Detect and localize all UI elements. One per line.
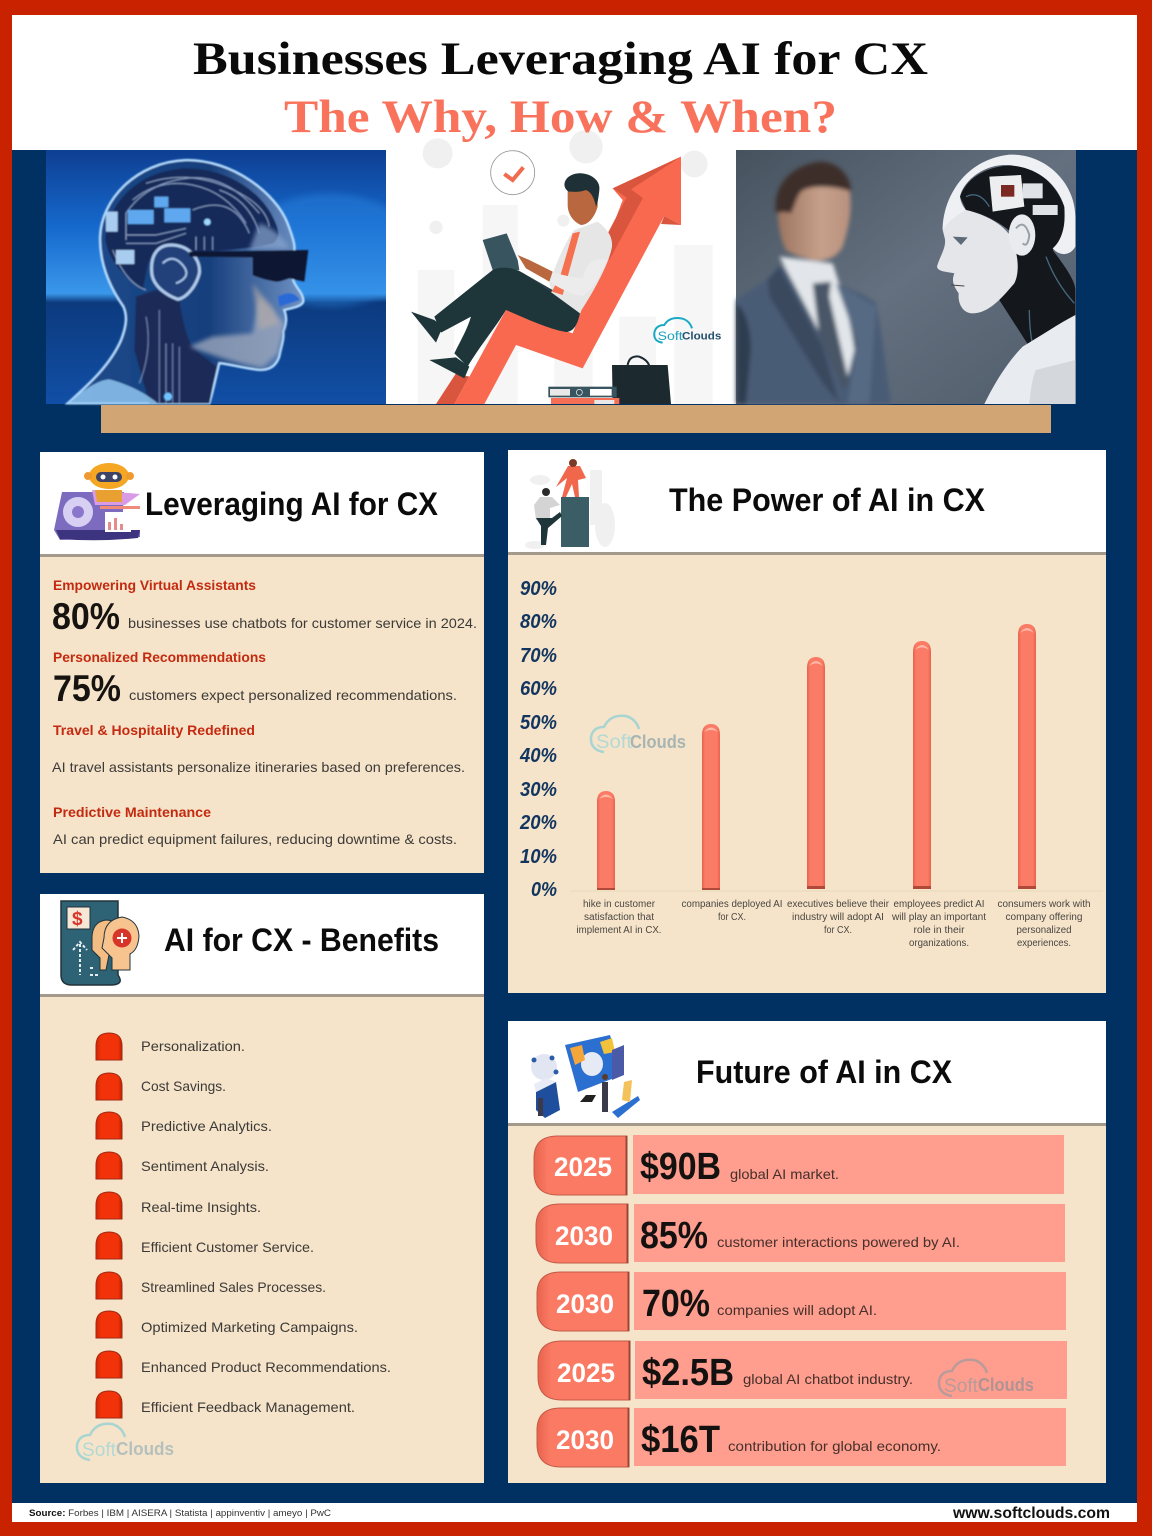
row: 2030 $16T — [537, 1408, 1066, 1467]
row: 2025 $90B: global AI market. — [730, 1166, 839, 1182]
logo: SoftClouds watermark — [939, 1360, 1034, 1397]
row: 2025 $90B: 2025 — [554, 1152, 612, 1182]
text block: personalized recommendations: Personalized Recommendations — [53, 649, 266, 665]
x axis labels: experiences. — [1017, 938, 1071, 949]
x axis labels: hike in customer — [583, 899, 656, 910]
benefit 7 — [96, 1272, 326, 1299]
benefit 1 — [96, 1033, 245, 1060]
benefits list — [96, 1033, 391, 1418]
benefit 6: Efficient Customer Service. — [141, 1239, 314, 1255]
y axis labels — [519, 578, 557, 901]
benefit 10: Efficient Feedback Management. — [141, 1399, 355, 1415]
row: 2025 $2.5B: $2.5B — [642, 1352, 734, 1394]
text block: personalized recommendations — [53, 649, 457, 709]
row: 2030 70%: 2030 — [556, 1289, 614, 1319]
bar: 80% — [1018, 624, 1036, 889]
benefit 2: Cost Savings. — [141, 1078, 226, 1094]
benefit 4 — [96, 1152, 269, 1179]
text block: virtual assistants: businesses use chatbots for customer service in 2024. — [128, 615, 477, 631]
benefit 4: Sentiment Analysis. — [141, 1158, 269, 1174]
text block: travel — [52, 722, 465, 775]
logo: SoftClouds watermark: Soft — [596, 732, 633, 753]
subtitle: The Why, How & When? — [284, 91, 837, 143]
title — [193, 33, 928, 143]
x axis labels: satisfaction that — [584, 912, 654, 923]
y axis labels: 30% — [520, 779, 557, 801]
x axis labels — [576, 899, 1090, 949]
row: 2030 85%: customer interactions powered by AI. — [717, 1234, 960, 1250]
panel: AI for CX - Benefits — [40, 894, 484, 1483]
x axis labels: consumers work with — [998, 899, 1090, 910]
benefit 6 — [96, 1232, 314, 1259]
text block: predictive maintenance — [53, 804, 457, 847]
logo: SoftClouds watermark — [591, 716, 686, 753]
y axis labels: 20% — [519, 812, 557, 834]
logo: SoftClouds watermark: Clouds — [978, 1375, 1034, 1395]
text block: travel: AI travel assistants personalize itineraries based on preferences. — [52, 759, 465, 775]
y axis labels: 40% — [519, 745, 557, 767]
y axis labels: 10% — [520, 846, 557, 868]
row: 2030 $16T: contribution for global economy. — [728, 1438, 941, 1454]
text block: predictive maintenance: AI can predict equipment failures, reducing downtime & costs. — [53, 831, 457, 847]
tan shelf — [101, 405, 1051, 433]
logo: SoftClouds: Soft — [658, 329, 683, 343]
x axis labels: for CX. — [824, 925, 852, 936]
panel: The Power of AI in CX — [508, 450, 1106, 993]
row: 2025 $90B — [534, 1135, 1064, 1195]
icon: people climbing column — [525, 459, 615, 549]
logo: SoftClouds: Clouds — [682, 330, 721, 342]
x axis labels: industry will adopt AI — [792, 912, 884, 923]
text block: personalized recommendations: 75% — [53, 668, 121, 709]
x axis labels: role in their — [914, 925, 965, 936]
row: 2025 $2.5B: global AI chatbot industry. — [743, 1371, 913, 1387]
bar: 70% — [807, 657, 825, 889]
row: 2030 70%: 70% — [642, 1283, 710, 1325]
image: human head with circuit brain — [46, 150, 416, 404]
x axis labels: organizations. — [909, 938, 969, 949]
row: 2025 $2.5B: 2025 — [557, 1358, 615, 1388]
benefit 5: Real-time Insights. — [141, 1199, 261, 1215]
heading: AI for CX - Benefits — [164, 922, 439, 958]
heading: The Power of AI in CX — [669, 482, 986, 518]
logo: SoftClouds watermark: Soft — [82, 1440, 117, 1461]
icon: AI isometric scene — [531, 1035, 640, 1118]
image: businessman on rising arrow — [386, 130, 736, 404]
benefit 8: Optimized Marketing Campaigns. — [141, 1319, 358, 1335]
text block: virtual assistants — [52, 577, 477, 637]
image: man facing robot — [736, 150, 1076, 404]
panel: Leveraging AI for CX — [40, 452, 484, 873]
icon: robot with laptop — [54, 463, 140, 540]
y axis labels: 80% — [520, 611, 557, 633]
x axis labels: will play an important — [891, 912, 986, 923]
text block: personalized recommendations: customers expect personalized recommendations. — [129, 687, 457, 703]
x axis labels: executives believe their — [787, 899, 890, 910]
bar: 50% — [702, 724, 720, 890]
row: 2030 $16T: $16T — [641, 1419, 720, 1461]
row: 2030 70% — [537, 1272, 1066, 1331]
website: www.softclouds.com — [952, 1505, 1110, 1522]
x axis labels: personalized — [1016, 925, 1072, 936]
icon: head with document — [61, 901, 139, 985]
logo: SoftClouds watermark: Clouds — [116, 1439, 174, 1459]
x axis labels: company offering — [1006, 912, 1082, 923]
row: 2030 $16T: 2030 — [556, 1425, 614, 1455]
bar: 75% — [913, 641, 931, 889]
benefit 10 — [96, 1391, 355, 1418]
benefit 9 — [96, 1351, 391, 1378]
text block: virtual assistants: Empowering Virtual Assistants — [53, 577, 256, 593]
heading: Leveraging AI for CX — [145, 486, 439, 522]
x axis labels: for CX. — [718, 912, 746, 923]
person — [411, 173, 612, 378]
benefit 5 — [96, 1192, 261, 1219]
benefit 3: Predictive Analytics. — [141, 1118, 272, 1134]
text block: virtual assistants: 80% — [52, 596, 120, 637]
logo: SoftClouds watermark: Soft — [944, 1376, 979, 1397]
benefit 8 — [96, 1311, 358, 1338]
row: 2030 70%: companies will adopt AI. — [717, 1302, 877, 1318]
benefit 1: Personalization. — [141, 1038, 245, 1054]
y axis labels: 60% — [520, 678, 557, 700]
x axis labels: companies deployed AI — [682, 899, 782, 910]
bar chart — [519, 578, 1103, 949]
y axis labels: 0% — [531, 879, 557, 901]
benefit 9: Enhanced Product Recommendations. — [141, 1359, 391, 1375]
benefit 7: Streamlined Sales Processes. — [141, 1279, 326, 1295]
benefit 2 — [96, 1073, 226, 1100]
red arrow — [436, 157, 681, 404]
row: 2025 $2.5B — [538, 1341, 1067, 1400]
y axis labels: 70% — [520, 645, 557, 667]
bar: 30% — [597, 791, 615, 890]
y axis labels: 90% — [520, 578, 557, 600]
heading: Future of AI in CX — [696, 1054, 953, 1090]
text block: predictive maintenance: Predictive Maintenance — [53, 804, 211, 820]
row: 2030 85%: 2030 — [555, 1221, 613, 1251]
row: 2030 85%: 85% — [640, 1215, 708, 1257]
benefit 3 — [96, 1112, 272, 1139]
text block: travel: Travel & Hospitality Redefined — [53, 722, 255, 738]
row: 2025 $90B: $90B — [640, 1146, 721, 1188]
x axis labels: employees predict AI — [894, 899, 984, 910]
title: Businesses Leveraging AI for CX — [193, 33, 928, 85]
footer sources: Source: Forbes | IBM | AISERA | Statista | appinventiv | ameyo | PwC — [29, 1508, 332, 1518]
logo: SoftClouds watermark: Clouds — [630, 732, 686, 752]
logo: SoftClouds — [654, 318, 721, 343]
row: 2030 85% — [536, 1204, 1065, 1263]
icon: head with document: $ — [72, 909, 83, 930]
x axis labels: implement AI in CX. — [576, 925, 662, 936]
footer sources — [29, 1505, 1110, 1522]
speech bubble check — [491, 151, 535, 195]
logo: SoftClouds watermark — [77, 1424, 174, 1461]
panel: Future of AI in CX — [508, 1021, 1106, 1483]
y axis labels: 50% — [520, 712, 557, 734]
briefcase and binders — [548, 356, 671, 404]
